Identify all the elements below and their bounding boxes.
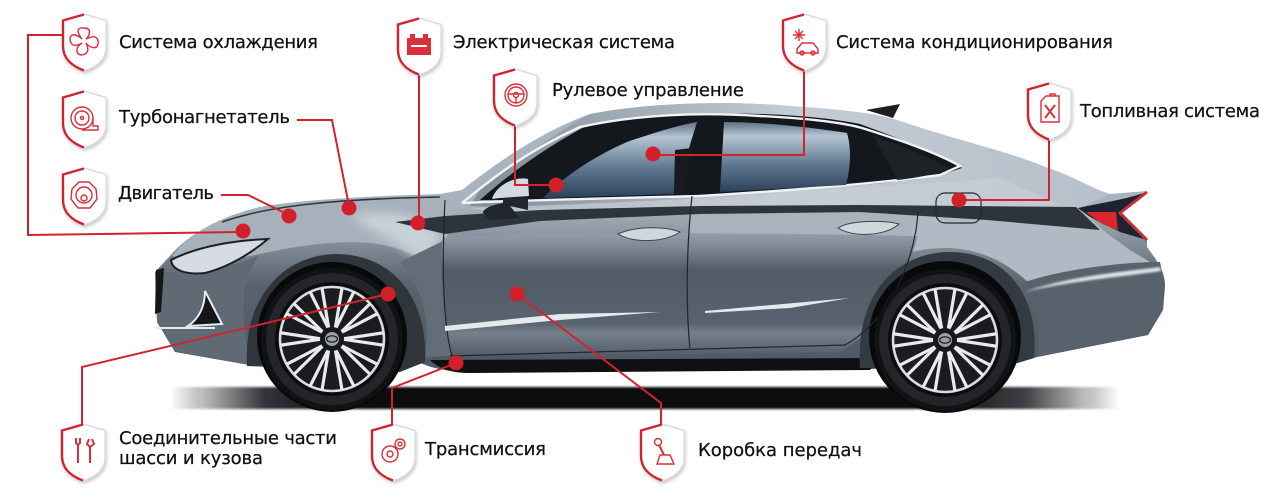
ground shadow xyxy=(170,387,1120,409)
item: air conditioning xyxy=(783,14,1113,71)
rear door light area xyxy=(690,212,918,254)
rear wheel xyxy=(874,269,1016,411)
front fender highlight xyxy=(350,213,442,262)
icon: fuel can xyxy=(1041,94,1059,122)
label: Коробка передач xyxy=(698,440,862,461)
tail lamp xyxy=(1078,192,1147,240)
item: chassis and body connections xyxy=(62,424,337,481)
label: Топливная система xyxy=(1079,101,1260,122)
label xyxy=(119,428,337,469)
roof and rear quarter light area xyxy=(470,103,1110,214)
rear bumper highlight xyxy=(1024,267,1161,292)
lower door panels xyxy=(441,233,918,358)
body dark stripe xyxy=(395,205,1100,234)
item: turbocharger xyxy=(63,91,290,148)
front bumper xyxy=(157,255,260,365)
label: Двигатель xyxy=(118,183,214,204)
rear lower body xyxy=(1025,262,1165,357)
label: шасси и кузова xyxy=(119,448,263,469)
item: engine xyxy=(63,168,214,225)
label: Трансмиссия xyxy=(424,439,546,460)
leader lines xyxy=(28,35,1049,424)
icon: battery xyxy=(407,34,431,55)
chrome trim xyxy=(462,114,960,203)
label: Электрическая система xyxy=(453,32,675,53)
fuel door xyxy=(936,193,981,223)
label: Система кондиционирования xyxy=(836,32,1113,53)
front seat headrest xyxy=(674,148,692,194)
headlight xyxy=(171,239,268,273)
icon: turbo xyxy=(71,107,98,130)
item: gearbox xyxy=(641,424,862,481)
icon: snowflake and car xyxy=(793,29,818,55)
door beltline highlight xyxy=(470,178,1060,218)
icon: fan xyxy=(70,28,98,55)
car xyxy=(155,103,1165,413)
door handles xyxy=(618,221,899,241)
door shut lines xyxy=(443,196,918,356)
marker dots xyxy=(236,146,966,370)
icon: engine xyxy=(71,182,97,208)
front grille xyxy=(155,268,164,314)
item: cooling system xyxy=(63,14,318,71)
rear fender light area xyxy=(905,208,1150,284)
door rocker highlight xyxy=(445,298,850,331)
label: Система охлаждения xyxy=(119,32,318,53)
roof antenna xyxy=(866,104,900,118)
item: steering xyxy=(494,69,744,126)
car body xyxy=(155,103,1165,372)
front window xyxy=(543,122,697,198)
quarter window xyxy=(872,135,950,180)
item: fuel system xyxy=(1028,83,1260,140)
icon: gears xyxy=(382,439,405,462)
label: Турбонагнетатель xyxy=(118,107,290,128)
window surround xyxy=(480,113,962,200)
bumper crease xyxy=(156,327,215,329)
front fender light area xyxy=(172,195,460,262)
label: Соединительные части xyxy=(119,428,337,449)
hood chrome line xyxy=(222,197,440,222)
icon: gear lever xyxy=(654,438,674,464)
icon: steering wheel xyxy=(505,84,527,106)
bumper intake xyxy=(188,291,222,326)
side mirror xyxy=(483,198,528,220)
front wheel xyxy=(261,268,403,410)
item: electrical system xyxy=(398,18,675,75)
sill xyxy=(430,358,880,373)
rear window xyxy=(720,122,850,192)
rear fender lower fender panel xyxy=(400,240,452,358)
front wheel arch xyxy=(247,254,425,372)
rear wheel arch xyxy=(860,252,1035,368)
item: transmission xyxy=(372,424,546,481)
label: Рулевое управление xyxy=(552,80,744,101)
icon: wrenches xyxy=(76,438,94,463)
